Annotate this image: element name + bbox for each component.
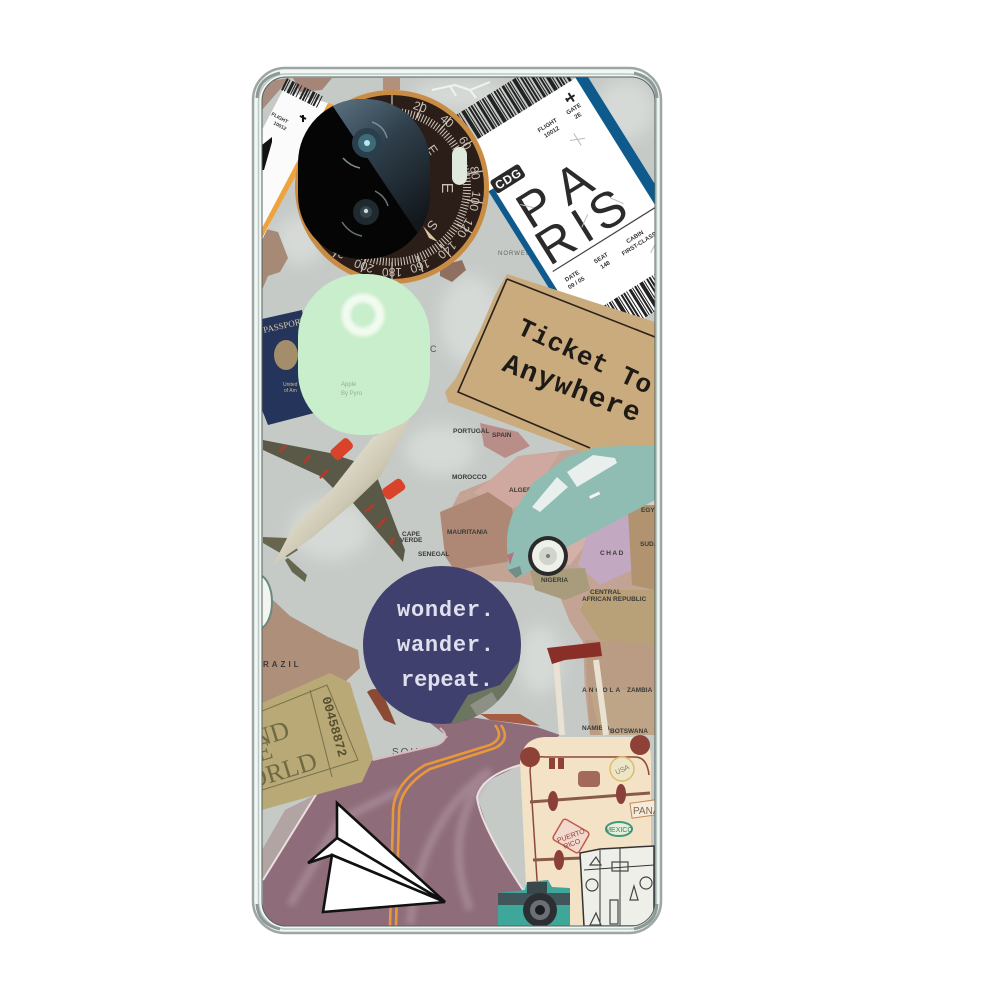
compass: 20	[411, 98, 429, 116]
flight details: SEAT	[593, 252, 610, 265]
compass: 120	[454, 216, 476, 240]
blue stripes	[488, 78, 654, 290]
map labels: CAPE	[402, 531, 421, 538]
gold ticket: 00458872	[318, 695, 350, 759]
compass: 220	[325, 238, 349, 262]
flash	[452, 147, 467, 185]
case bumper	[253, 68, 661, 933]
compass: 80	[467, 165, 483, 181]
flight details: 2E	[574, 112, 583, 121]
road	[262, 689, 560, 926]
handle	[547, 642, 606, 735]
suitcase	[520, 642, 660, 926]
wonder circle: wonder.	[397, 598, 494, 623]
city text	[516, 167, 626, 264]
engines	[329, 437, 407, 501]
map labels: CENTRAL	[590, 589, 621, 596]
flight details: FIRST-CLASS	[621, 231, 658, 257]
passport: PASSPORT	[262, 315, 307, 335]
map labels: MOROCCO	[452, 474, 487, 481]
flight details	[538, 92, 654, 289]
compass: E	[438, 183, 455, 193]
map labels: PORTUGAL	[453, 428, 490, 435]
stickers: PUERTO	[556, 828, 586, 845]
printed collage	[262, 78, 654, 926]
gold ticket: ND	[248, 715, 293, 754]
sketch suitcase	[580, 846, 654, 926]
green pill module: By Pyro	[341, 391, 363, 397]
passport: of Am	[284, 388, 297, 394]
left boarding pass: FLIGHT	[270, 111, 289, 125]
stickers: PANA	[633, 806, 660, 817]
stickers: USA	[615, 764, 631, 777]
barcodes	[456, 78, 654, 318]
map labels: C	[430, 344, 437, 354]
inner rim line	[262, 77, 655, 926]
compass: 60	[456, 134, 475, 153]
map labels: AFRICAN REPUBLIC	[582, 596, 647, 603]
left boarding pass: 10012	[272, 120, 287, 132]
compass: 100	[466, 190, 484, 212]
stickers: MEXICO	[605, 827, 633, 834]
gold ticket: E	[252, 735, 276, 768]
paper plane	[308, 803, 445, 912]
compass: 200	[352, 256, 376, 276]
passport: United	[283, 382, 298, 388]
green pill module	[298, 274, 430, 435]
lower lens	[342, 191, 388, 236]
flight details: 148	[600, 260, 612, 271]
ticket to anywhere: Ticket To	[513, 313, 657, 402]
compass: 40	[437, 111, 457, 131]
upper lens	[343, 122, 387, 168]
map labels: ZAMBIA	[627, 687, 653, 694]
gold ticket: ORLD	[244, 746, 320, 795]
flight details: FLIGHT	[537, 118, 559, 134]
flight details: 09 / 05	[567, 276, 587, 291]
compass: 160	[408, 256, 432, 276]
camera	[498, 880, 570, 927]
wonder circle	[363, 566, 525, 730]
map labels: BOTSWANA	[610, 728, 648, 735]
map land: iberia	[480, 423, 530, 458]
green pill module: Apple	[341, 382, 357, 388]
map labels: EGYPT	[641, 507, 663, 514]
map labels: RAZIL	[263, 660, 302, 669]
world map background	[262, 77, 663, 926]
map land: north america fragments	[262, 78, 466, 290]
car windows	[532, 477, 568, 512]
map labels: MAURITANIA	[447, 529, 488, 536]
map labels: NIGERIA	[541, 577, 568, 584]
map labels: SPAIN	[492, 432, 512, 439]
left boarding pass	[262, 84, 334, 240]
compass	[295, 90, 489, 284]
ticket to anywhere: Anywhere	[498, 349, 644, 430]
stickers	[552, 757, 660, 854]
map labels: NORWEGIAN SEA	[498, 251, 562, 257]
flight details: GATE	[566, 103, 583, 116]
map labels: SENEGAL	[418, 551, 449, 558]
phone case product image	[252, 66, 662, 934]
car	[507, 445, 655, 578]
map labels: ALGERIA	[509, 487, 539, 494]
map labels: VERDE	[400, 537, 423, 544]
flight details: CABIN	[626, 230, 645, 245]
city text: RIS	[526, 177, 637, 276]
gold ticket	[262, 673, 373, 810]
city text: PA	[507, 150, 603, 239]
wonder circle: repeat.	[401, 668, 493, 693]
map labels: SUDAN	[640, 541, 663, 548]
passport	[262, 310, 318, 425]
map labels: ANGOLA	[582, 687, 622, 694]
car wheel	[528, 536, 568, 576]
map labels: NAMIBIA	[582, 725, 610, 732]
compass: 140	[435, 238, 459, 262]
flight details: 10012	[543, 125, 561, 140]
small badge	[262, 575, 273, 629]
compass: 180	[382, 265, 402, 279]
ticket to anywhere	[445, 274, 657, 460]
yellow center line	[390, 725, 505, 926]
map land: brazil	[262, 600, 360, 710]
camera island	[298, 99, 440, 259]
road shading	[290, 770, 490, 925]
map labels	[263, 251, 663, 758]
airplane	[263, 420, 410, 582]
straps	[530, 784, 650, 870]
map labels: CHAD	[600, 550, 625, 557]
map labels: SOUTH	[392, 747, 437, 758]
paris boarding pass	[456, 78, 654, 318]
map land: africa	[440, 440, 655, 735]
wonder circle: wander.	[397, 633, 494, 658]
compass: E	[424, 142, 441, 158]
compass: S	[424, 217, 441, 233]
CDG tag: CDG	[492, 166, 524, 193]
flight details: DATE	[564, 270, 581, 284]
stickers: RICO	[563, 838, 582, 851]
